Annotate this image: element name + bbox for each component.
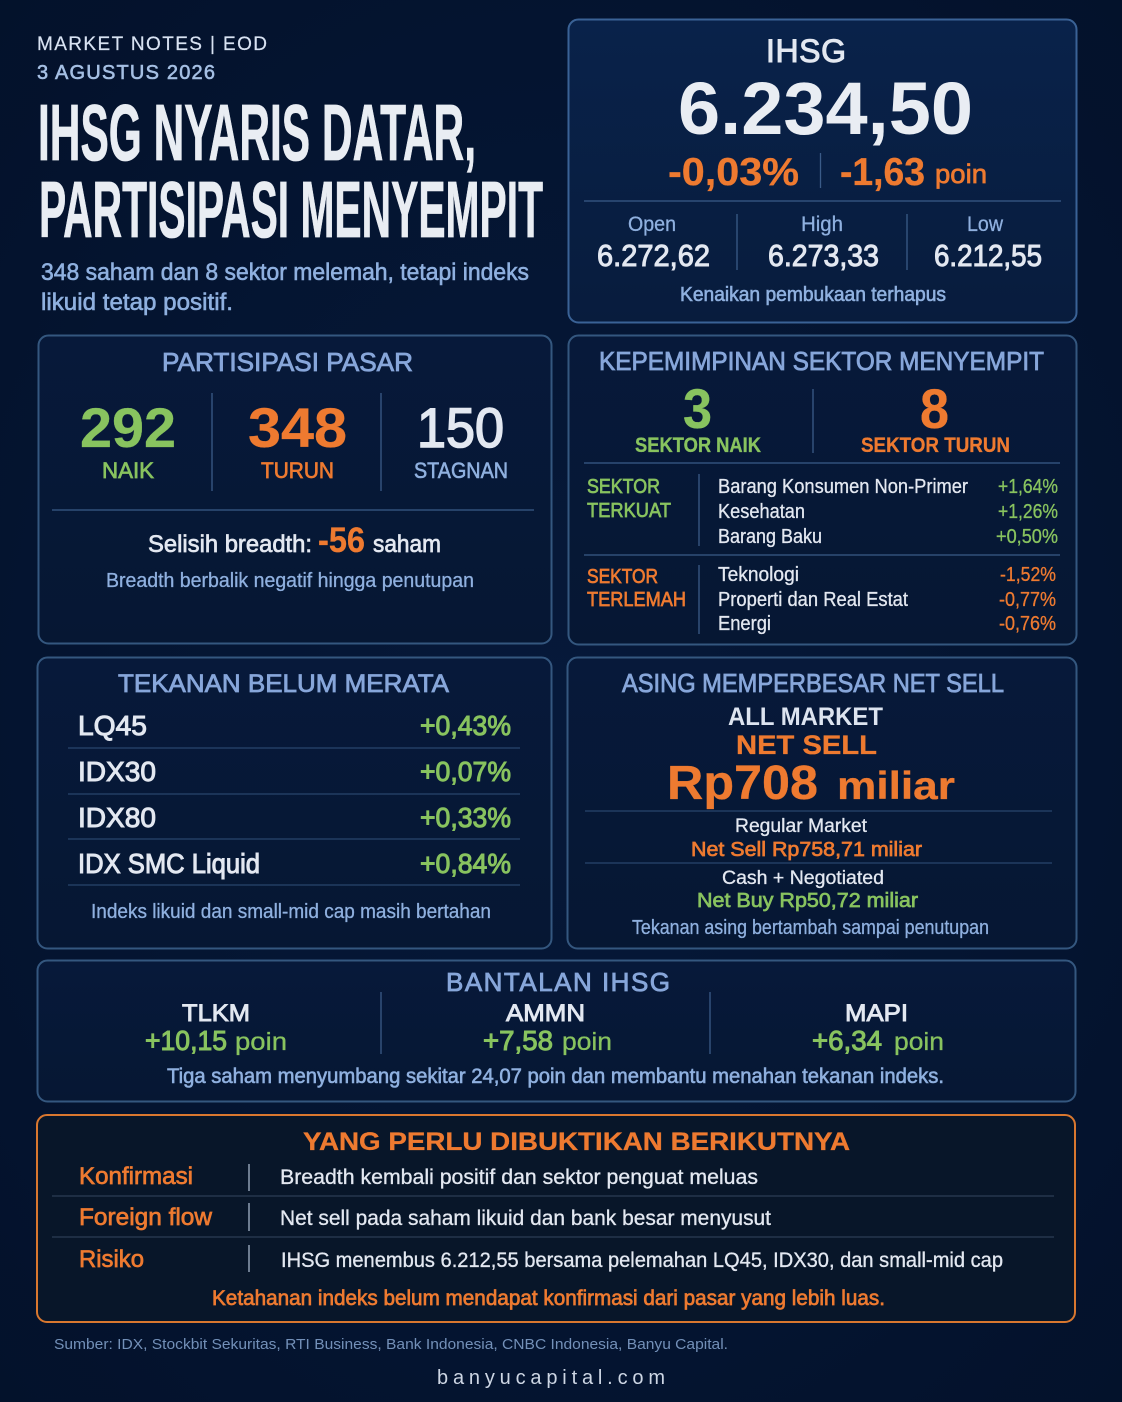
subtitle: 348 saham dan 8 sektor melemah, tetapi indeks <box>41 259 529 286</box>
row konfirmasi <box>79 1163 758 1191</box>
row konfirmasi: Konfirmasi <box>79 1163 193 1190</box>
net sell amount: Rp708 <box>667 757 818 810</box>
row risiko <box>79 1245 1003 1273</box>
regular market <box>691 816 922 861</box>
selisih breadth: saham <box>373 531 441 558</box>
note: Breadth berbalik negatif hingga penutupan <box>106 570 474 592</box>
label sektor terkuat: TERKUAT <box>587 500 671 522</box>
source note: Sumber: IDX, Stockbit Sekuritas, RTI Business, Bank Indonesia, CNBC Indonesia, Banyu Capital. <box>54 1336 728 1353</box>
AMMN: poin <box>562 1028 612 1056</box>
low: Low <box>967 213 1004 236</box>
heading: ASING MEMPERBESAR NET SELL <box>622 668 1004 698</box>
sektor terlemah rows: -0,76% <box>999 613 1056 635</box>
TLKM: +10,15 <box>145 1025 227 1056</box>
naik: NAIK <box>102 458 154 483</box>
low: 6.212,55 <box>934 238 1042 273</box>
label IHSG: IHSG <box>766 33 846 69</box>
selisih breadth <box>148 521 441 560</box>
MAPI: MAPI <box>845 1000 908 1027</box>
sektor terkuat rows: Barang Konsumen Non-Primer <box>718 476 968 498</box>
regular market: Net Sell Rp758,71 miliar <box>691 839 922 861</box>
MAPI: +6,34 <box>812 1025 882 1056</box>
open: Open <box>628 213 676 236</box>
row foreign flow: Net sell pada saham likuid dan bank besar menyusut <box>280 1207 771 1230</box>
row LQ45: +0,43% <box>420 710 511 741</box>
heading: TEKANAN BELUM MERATA <box>118 670 449 698</box>
net sell amount <box>667 757 955 810</box>
row IDX SMC Liquid: IDX SMC Liquid <box>78 848 260 879</box>
sektor terlemah rows <box>718 564 1056 635</box>
open <box>597 213 710 273</box>
index value: 6.234,50 <box>678 67 973 150</box>
low <box>934 213 1042 273</box>
row IDX SMC Liquid <box>78 848 511 879</box>
heading: KEPEMIMPINAN SEKTOR MENYEMPIT <box>599 346 1044 376</box>
label sektor terkuat <box>587 476 671 522</box>
sektor terkuat rows: Barang Baku <box>718 526 822 548</box>
sektor terlemah rows: -0,77% <box>999 589 1056 611</box>
header block <box>37 34 543 316</box>
label sektor terkuat: SEKTOR <box>587 476 660 498</box>
turun: TURUN <box>261 458 334 483</box>
heading: BANTALAN IHSG <box>446 967 670 997</box>
point change: poin <box>935 159 987 189</box>
point change: -1,63 <box>840 151 925 194</box>
TLKM <box>145 1000 287 1056</box>
cash + negotiated <box>697 868 918 912</box>
sektor terlemah rows: Teknologi <box>718 564 799 586</box>
stagnan <box>414 396 508 483</box>
row IDX30: +0,07% <box>420 756 511 787</box>
label sektor terlemah: SEKTOR <box>587 566 658 588</box>
sektor terlemah rows: Energi <box>718 613 771 635</box>
title <box>38 88 543 254</box>
row konfirmasi: Breadth kembali positif dan sektor penguat meluas <box>280 1166 758 1189</box>
title: IHSG NYARIS DATAR, <box>38 88 476 177</box>
heading: YANG PERLU DIBUKTIKAN BERIKUTNYA <box>303 1128 850 1156</box>
row IDX80: +0,33% <box>420 802 511 833</box>
regular market: Regular Market <box>735 816 868 837</box>
sektor terlemah rows: Properti dan Real Estat <box>718 589 908 611</box>
panel: tekanan belum merata <box>38 658 552 948</box>
label sektor terlemah <box>587 566 686 611</box>
net sell: NET SELL <box>736 730 877 760</box>
row IDX30 <box>78 756 511 787</box>
row LQ45 <box>78 710 511 741</box>
row foreign flow: Foreign flow <box>79 1204 213 1231</box>
panel: asing memperbesar net sell <box>568 658 1076 948</box>
sektor terlemah rows: -1,52% <box>1000 564 1056 586</box>
turun <box>248 396 347 483</box>
selisih breadth: Selisih breadth: <box>148 531 312 558</box>
row IDX80 <box>78 802 511 833</box>
sektor naik <box>635 377 761 457</box>
sektor naik: 3 <box>683 377 712 440</box>
panel: partisipasi pasar <box>38 336 552 644</box>
sektor terkuat rows: +1,26% <box>998 501 1058 523</box>
subtitle: likuid tetap positif. <box>41 289 233 316</box>
sektor terkuat rows: +1,64% <box>998 476 1058 498</box>
net sell amount: miliar <box>837 765 955 808</box>
MAPI <box>812 1000 944 1056</box>
open: 6.272,62 <box>597 238 710 273</box>
website: banyucapital.com <box>437 1367 665 1389</box>
high: High <box>801 213 843 236</box>
stagnan: 150 <box>417 396 504 459</box>
AMMN <box>483 1000 612 1056</box>
note: Kenaikan pembukaan terhapus <box>680 284 946 306</box>
TLKM: poin <box>235 1028 287 1056</box>
conclusion: Ketahanan indeks belum mendapat konfirmasi dari pasar yang lebih luas. <box>212 1287 885 1310</box>
title: PARTISIPASI MENYEMPIT <box>39 165 543 254</box>
MAPI: poin <box>894 1028 944 1056</box>
all market: ALL MARKET <box>728 703 883 731</box>
panel: yang perlu dibuktikan berikutnya <box>37 1115 1075 1322</box>
naik: 292 <box>80 396 176 459</box>
label sektor terlemah: TERLEMAH <box>587 589 686 611</box>
point change <box>840 151 987 194</box>
panel: bantalan IHSG <box>38 960 1076 1102</box>
note: Tiga saham menyumbang sekitar 24,07 poin dan membantu menahan tekanan indeks. <box>167 1065 944 1088</box>
sektor terkuat rows: Kesehatan <box>718 501 805 523</box>
note: Indeks likuid dan small-mid cap masih bertahan <box>91 901 491 923</box>
row risiko: IHSG menembus 6.212,55 bersama pelemahan LQ45, IDX30, dan small-mid cap <box>281 1249 1003 1272</box>
cash + negotiated: Cash + Negotiated <box>722 868 884 889</box>
turun: 348 <box>248 396 347 459</box>
sektor turun: SEKTOR TURUN <box>861 434 1010 457</box>
sektor turun: 8 <box>920 377 949 440</box>
row risiko: Risiko <box>79 1246 144 1273</box>
high <box>768 213 879 273</box>
date: 3 AGUSTUS 2026 <box>37 62 215 84</box>
note: Tekanan asing bertambah sampai penutupan <box>632 917 989 939</box>
sektor terkuat rows <box>718 476 1058 548</box>
row IDX SMC Liquid: +0,84% <box>420 848 511 879</box>
heading: PARTISIPASI PASAR <box>162 347 413 377</box>
panel: kepemimpinan sektor <box>568 336 1076 644</box>
AMMN: +7,58 <box>483 1025 553 1056</box>
row foreign flow <box>79 1203 771 1231</box>
eyebrow label: MARKET NOTES | EOD <box>37 34 267 55</box>
row LQ45: LQ45 <box>78 710 147 741</box>
cash + negotiated: Net Buy Rp50,72 miliar <box>697 890 918 912</box>
selisih breadth: -56 <box>318 521 365 560</box>
subtitle <box>41 259 529 316</box>
sektor turun <box>861 377 1010 457</box>
sektor terkuat rows: +0,50% <box>996 526 1058 548</box>
sektor naik: SEKTOR NAIK <box>635 434 761 457</box>
row IDX80: IDX80 <box>78 802 156 833</box>
TLKM: TLKM <box>182 1000 250 1027</box>
AMMN: AMMN <box>506 1000 585 1027</box>
percent change: -0,03% <box>668 151 799 194</box>
high: 6.273,33 <box>768 238 879 273</box>
panel: IHSG <box>568 20 1076 322</box>
stagnan: STAGNAN <box>414 458 508 483</box>
row IDX30: IDX30 <box>78 756 156 787</box>
